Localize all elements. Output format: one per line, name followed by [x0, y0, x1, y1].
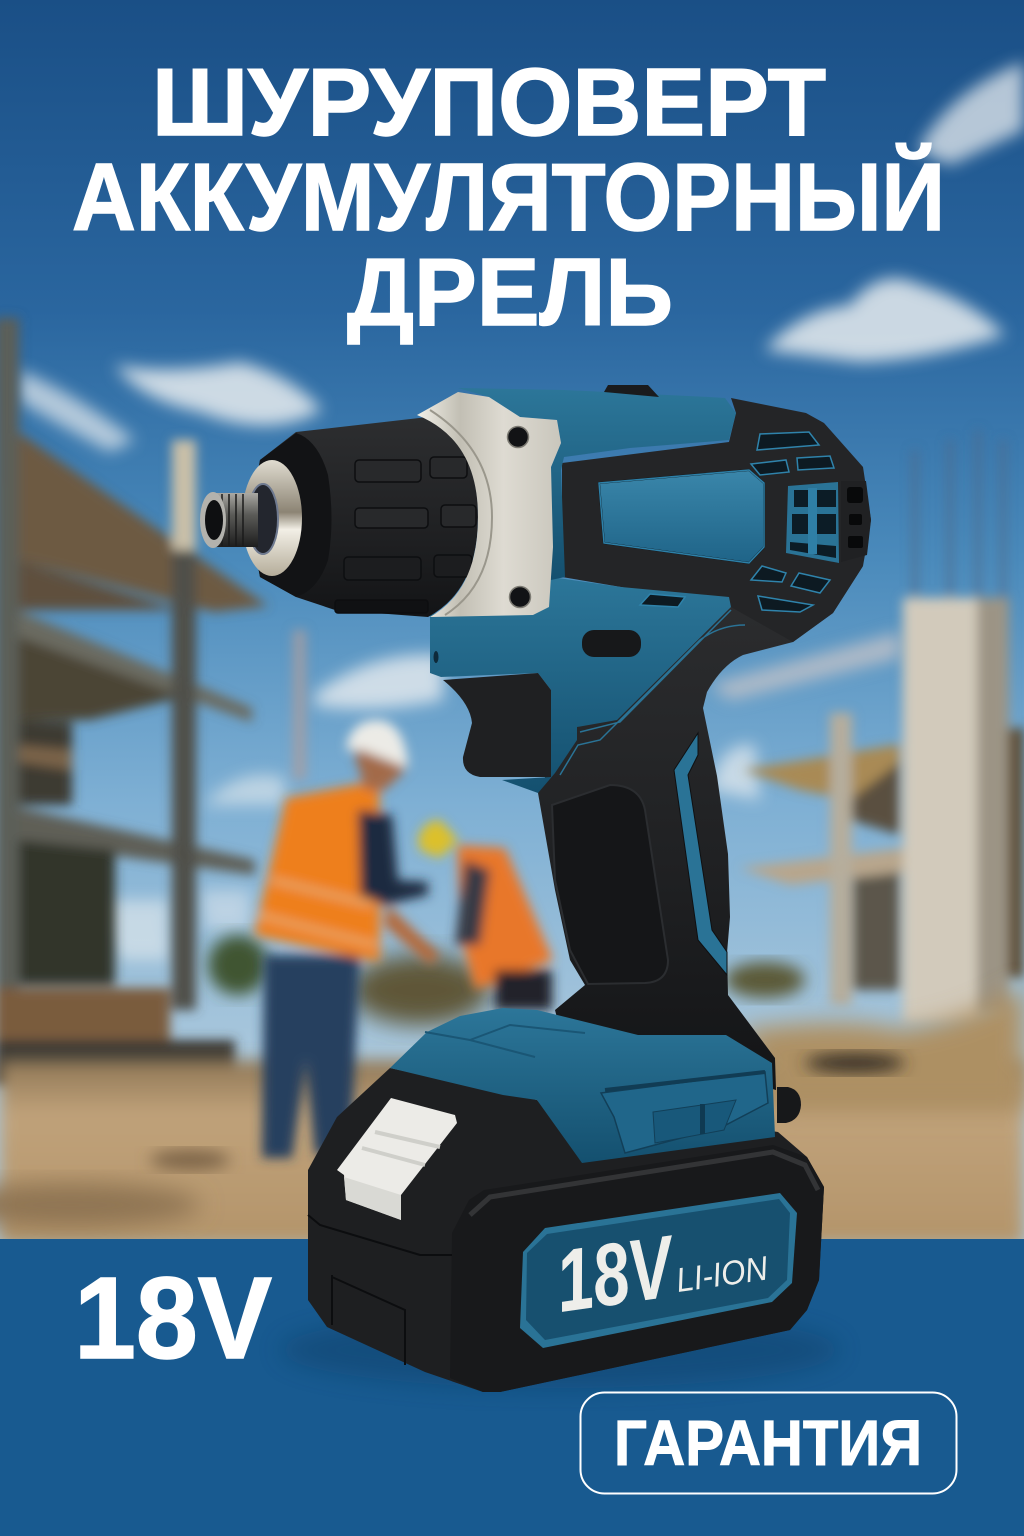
- workers: [254, 720, 553, 1158]
- direction switch: [582, 630, 641, 657]
- battery top blue: [390, 1008, 775, 1163]
- silver nose ring: [242, 460, 302, 576]
- clouds: [18, 62, 1024, 960]
- handle blue stripe: [674, 733, 727, 975]
- trigger: [443, 673, 551, 777]
- battery clip: [601, 1072, 768, 1153]
- body pin hole: [434, 651, 438, 663]
- battery top ridge: [425, 1025, 585, 1057]
- left building: [0, 318, 306, 1085]
- title: АККУМУЛЯТОРНЫЙ: [72, 142, 945, 251]
- battery lower seam: [308, 1215, 452, 1365]
- top button: [604, 385, 659, 397]
- title: ДРЕЛЬ: [347, 239, 673, 346]
- chuck front segment: [254, 433, 332, 597]
- panel edge line: [599, 470, 764, 563]
- rear battery knob: [777, 1087, 801, 1123]
- chuck grip ribs: [335, 457, 476, 613]
- silver collar: [417, 392, 561, 617]
- upper blue body: [458, 388, 736, 580]
- blue edge lines on handle: [560, 610, 745, 775]
- warranty badge: ГАРАНТИЯ: [614, 1407, 922, 1479]
- bottom blue band: [0, 1239, 1024, 1536]
- shell highlight: [470, 1152, 818, 1215]
- ground: [0, 935, 1024, 1245]
- battery label plate: 18V: [550, 1216, 683, 1331]
- drill illustration: [200, 385, 871, 1392]
- battery right shell: [450, 1145, 824, 1392]
- nose dark inner: [248, 484, 278, 554]
- right building: [740, 430, 1024, 1023]
- white latch: [337, 1098, 457, 1220]
- threaded bit holder: [200, 492, 258, 548]
- chuck: [254, 417, 478, 617]
- title: [72, 49, 945, 346]
- collar inner arc: [430, 410, 492, 615]
- warranty badge: [580, 1392, 956, 1494]
- handle grip panel: [552, 785, 668, 984]
- main rear grille: [786, 482, 839, 563]
- collar screws: [508, 426, 530, 608]
- drill handle: [538, 566, 863, 1090]
- rear housing: [562, 398, 871, 642]
- end cap vents: [841, 481, 871, 562]
- voltage label: 18V: [74, 1253, 272, 1383]
- battery label plate: [520, 1193, 797, 1348]
- battery label plate: LI-ION: [674, 1249, 771, 1300]
- rear vents: [640, 432, 834, 612]
- battery body: [308, 1068, 824, 1392]
- side blue panel: [599, 470, 764, 563]
- lower blue body: [430, 577, 731, 793]
- title: ШУРУПОВЕРТ: [152, 49, 826, 156]
- battery shadow: [280, 1312, 840, 1388]
